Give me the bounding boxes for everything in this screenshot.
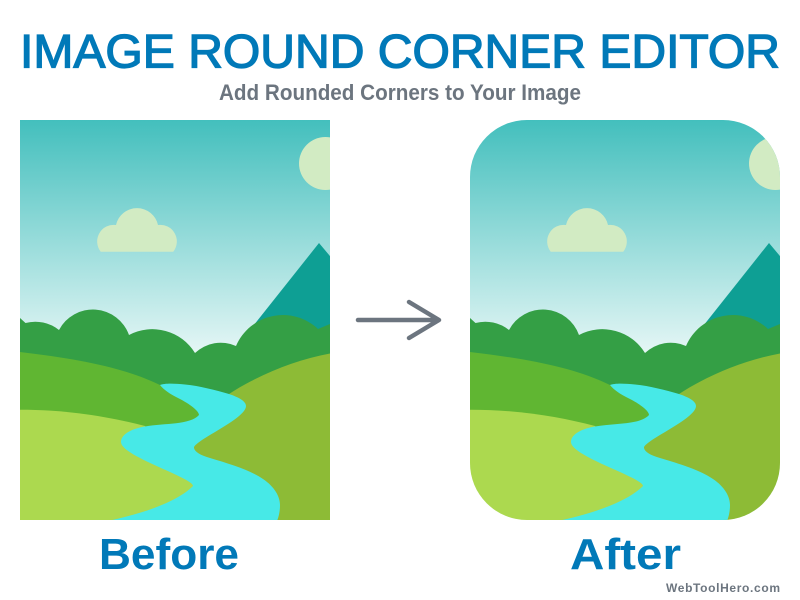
cloud (97, 208, 177, 252)
light green hill (470, 410, 643, 520)
right hill (190, 354, 330, 522)
label: before: Before (99, 530, 239, 579)
arrow (358, 302, 439, 338)
sun (299, 137, 330, 190)
river (108, 384, 280, 521)
light green hill (20, 410, 193, 520)
sky (470, 120, 780, 353)
watermark: WebToolHero.com (666, 581, 780, 595)
tree line (470, 310, 780, 394)
after image: rounded-corner landscape (470, 120, 800, 522)
sky (20, 120, 330, 353)
river (558, 384, 730, 521)
cloud (547, 208, 627, 252)
before image: square-cornered landscape (20, 120, 352, 522)
sun (749, 139, 780, 190)
dark green hill (20, 352, 199, 426)
label: after: After (570, 530, 681, 579)
tree line (20, 310, 330, 394)
title: IMAGE ROUND CORNER EDITOR (20, 24, 780, 78)
subtitle: Add Rounded Corners to Your Image (219, 80, 581, 105)
mountain (255, 243, 330, 329)
dark green hill (470, 352, 649, 426)
mountain (705, 243, 780, 329)
right hill (640, 354, 780, 522)
